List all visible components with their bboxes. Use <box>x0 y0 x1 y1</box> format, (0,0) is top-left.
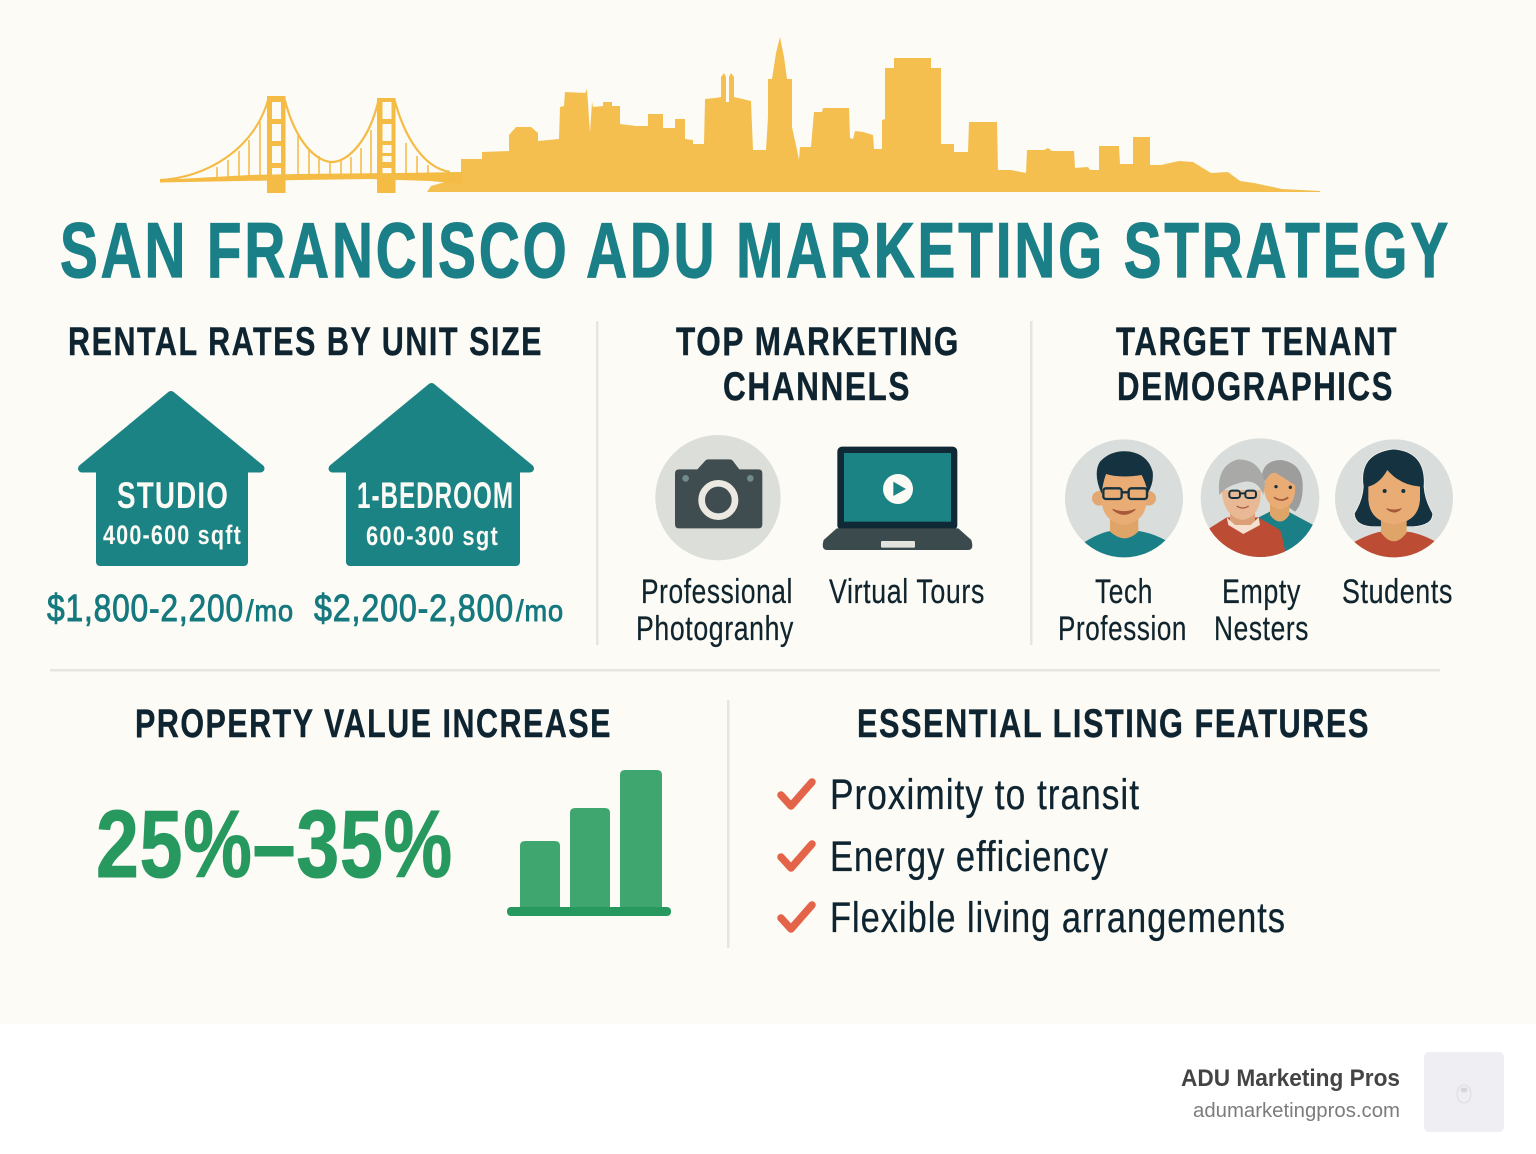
panel: essential listing features <box>781 702 1370 942</box>
heading: top marketing channels: CHANNELS <box>723 365 911 409</box>
feature: flexible living arrangements: Flexible living arrangements <box>830 894 1286 942</box>
logo placeholder <box>1424 1052 1504 1132</box>
label: empty nesters: Nesters <box>1214 610 1309 648</box>
one-bedroom house: 600-300 sgt <box>366 521 499 551</box>
label: professional photography: Professional <box>641 573 793 611</box>
studio house <box>82 395 260 562</box>
panel: property value increase <box>96 702 671 916</box>
label: professional photography <box>636 573 794 648</box>
brand url: adumarketingpros.com <box>1193 1100 1400 1122</box>
label: students: Students <box>1342 573 1453 611</box>
panel: rental rates by unit size <box>47 320 564 630</box>
heading: target tenant demographics: DEMOGRAPHICS <box>1117 365 1394 409</box>
studio price: $1,800-2,200 <box>47 588 244 630</box>
label: tech profession: Tech <box>1095 573 1153 611</box>
skyline with Golden Gate Bridge <box>160 37 1320 193</box>
label: virtual tours: Virtual Tours <box>829 573 985 611</box>
icon: student <box>1335 439 1453 563</box>
icon: tech professional <box>1065 439 1183 563</box>
panel: top marketing channels <box>636 320 985 648</box>
heading: property value increase: PROPERTY VALUE INCREASE <box>135 702 612 746</box>
heading: rental rates: RENTAL RATES BY UNIT SIZE <box>68 320 543 364</box>
studio house: STUDIO <box>117 475 229 516</box>
heading: top marketing channels: TOP MARKETING <box>676 320 960 364</box>
icon: empty nesters <box>1201 438 1319 563</box>
heading: target tenant demographics: TARGET TENANT <box>1116 320 1398 364</box>
label: tech profession <box>1058 573 1187 648</box>
icon: camera <box>655 435 781 560</box>
one-bedroom house <box>332 387 530 562</box>
one-bedroom house: 1-BEDROOM <box>357 475 514 516</box>
bar chart icon <box>507 770 671 916</box>
feature: energy efficiency: Energy efficiency <box>830 833 1109 881</box>
panel: target tenant demographics <box>1058 320 1453 648</box>
feature: proximity to transit: Proximity to transit <box>830 771 1140 819</box>
stat: 25%-35%: 25%–35% <box>96 791 453 898</box>
heading: target tenant demographics <box>1116 320 1398 409</box>
icon: laptop with play button <box>823 447 972 550</box>
one-bedroom price: $2,200-2,800 <box>314 588 514 630</box>
studio price: /mo <box>246 595 294 628</box>
footer brand <box>1181 1052 1504 1132</box>
one-bedroom price: /mo <box>516 595 564 628</box>
heading: essential listing features: ESSENTIAL LISTING FEATURES <box>857 702 1370 746</box>
label: professional photography: Photogranhy <box>636 610 794 648</box>
studio house: 400-600 sqft <box>103 520 242 550</box>
brand name: ADU Marketing Pros <box>1181 1065 1400 1092</box>
label: tech profession: Profession <box>1058 610 1187 648</box>
label: empty nesters: Empty <box>1222 573 1301 611</box>
label: empty nesters <box>1214 573 1309 648</box>
heading: top marketing channels <box>676 320 960 409</box>
